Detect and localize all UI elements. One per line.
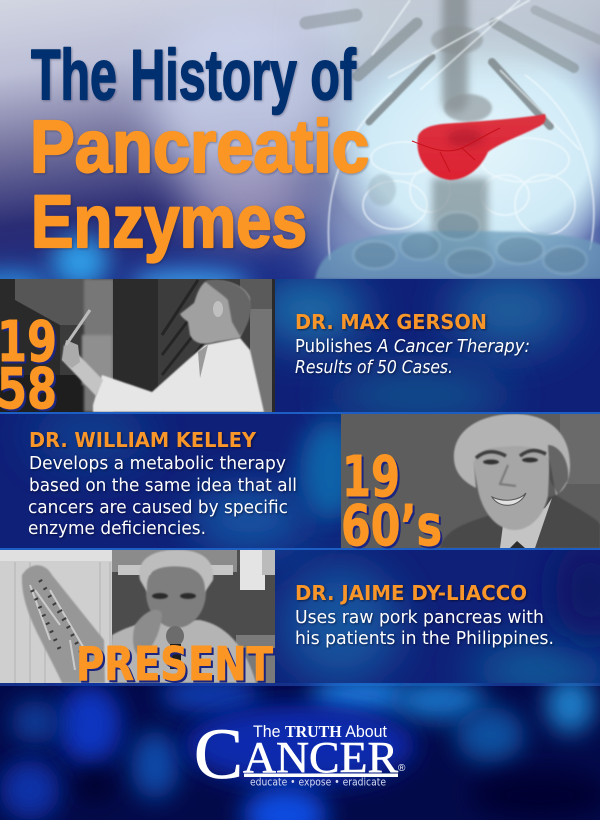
logo: The Truth About Cancer — [194, 714, 406, 794]
icon: red pancreas — [412, 114, 546, 180]
text block: Dr. William Kelley: Develops a metabolic therapy — [29, 454, 286, 474]
title: The History of — [31, 36, 356, 116]
logo: tagline: educate • expose • eradicate — [250, 776, 386, 788]
year: present: PRESENT — [76, 637, 274, 691]
text block: Dr. Max Gerson: Results of 50 Cases. — [295, 358, 453, 378]
logo: ANCER: ANCER — [243, 733, 399, 782]
text block: Dr. Jaime Dy-Liacco: Uses raw pork pancreas with — [295, 608, 544, 628]
logo: registered mark: ® — [398, 763, 406, 774]
logo: big C: C — [194, 714, 243, 794]
text block: Dr. William Kelley: DR. WILLIAM KELLEY — [29, 428, 257, 452]
logo line: The Truth About: The TRUTH About — [253, 722, 387, 741]
panel: footer background — [0, 677, 600, 820]
panel: header with x-ray background — [0, 0, 600, 301]
text block: Dr. William Kelley: cancers are caused by specific — [28, 498, 288, 518]
text block: Dr. William Kelley: based on the same idea that all — [29, 476, 297, 496]
panel: timeline rows background — [0, 270, 600, 695]
text block: Dr. Jaime Dy-Liacco: his patients in the Philippines. — [295, 629, 554, 649]
title: Pancreatic — [30, 105, 369, 188]
text block: Dr. William Kelley: enzyme deficiencies. — [28, 519, 206, 539]
title: Enzymes — [31, 180, 307, 263]
photo: Dr. William Kelley — [341, 414, 600, 548]
text block: Dr. Max Gerson — [295, 310, 530, 378]
photo: Dr. Jaime Dy-Liacco — [0, 550, 275, 683]
photo: Dr. Max Gerson — [0, 279, 275, 412]
logo: rule — [244, 774, 398, 777]
text block: Dr. Max Gerson: DR. MAX GERSON — [295, 310, 487, 334]
title — [30, 36, 369, 263]
text block: Dr. William Kelley — [28, 428, 297, 539]
text block: Dr. Max Gerson: Publishes A Cancer Therapy: — [295, 337, 530, 357]
text block: Dr. Jaime Dy-Liacco: DR. JAIME DY-LIACCO — [295, 581, 527, 605]
icon: x-ray torso — [306, 0, 600, 279]
year: 1960's: 60’s — [341, 494, 442, 559]
year: 1960's: 19 — [342, 445, 400, 510]
text block: Dr. Jaime Dy-Liacco — [295, 581, 554, 649]
